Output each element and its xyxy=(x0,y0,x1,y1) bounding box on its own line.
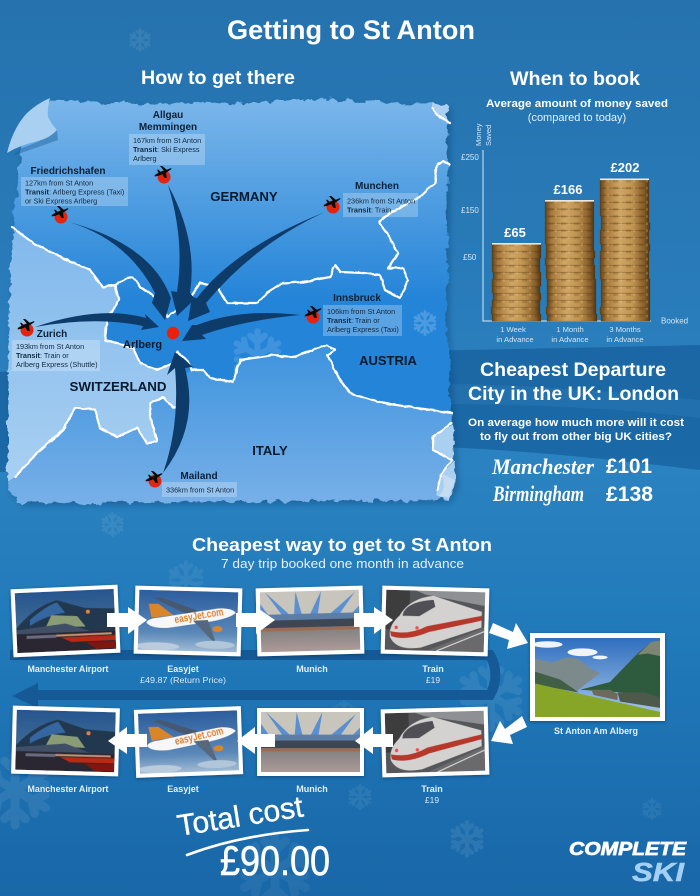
route labels: Manchester Airport xyxy=(28,784,108,794)
title: Getting to St Anton xyxy=(227,15,475,45)
location: Allgau Memmingen: Transit: Ski Express xyxy=(133,145,200,154)
bar labels: in Advance xyxy=(551,335,589,344)
total cost callout: £90.00 xyxy=(220,837,330,884)
chart axes: £150 xyxy=(461,206,479,215)
location: Zurich xyxy=(12,319,100,371)
logo: Complete Ski: SKI xyxy=(632,857,685,887)
text: departure question: On average how much more will it cost xyxy=(468,417,684,429)
route labels: Easyjet xyxy=(167,784,199,794)
location: Friedrichshafen: Transit: Arlberg Express (Taxi) xyxy=(25,188,124,196)
logo: Complete Ski xyxy=(569,839,687,887)
heading: cheapest way: Cheapest way to get to St Anton xyxy=(192,535,492,555)
text: chart subtitle xyxy=(486,98,668,124)
price list: other UK cities: Birmingham xyxy=(492,481,584,506)
heading: cheapest departure city: City in the UK: London xyxy=(468,384,679,405)
text: chart subtitle: (compared to today) xyxy=(528,112,626,124)
location: Allgau Memmingen: 167km from St Anton xyxy=(133,136,201,145)
bar values: £166 xyxy=(554,182,582,197)
location: Friedrichshafen: 127km from St Anton xyxy=(25,178,93,188)
country labels: ITALY xyxy=(252,443,288,458)
location: Munchen: Transit: Train xyxy=(347,206,391,214)
heading: cheapest way: 7 day trip booked one month in advance xyxy=(221,556,464,571)
bar labels: in Advance xyxy=(496,335,534,344)
white arrows between photos xyxy=(107,607,528,754)
photo: Easyjet outbound xyxy=(134,586,242,656)
chart axes: £250 xyxy=(461,153,479,162)
location: Zurich: 193km from St Anton xyxy=(16,342,84,351)
logo: Complete Ski: COMPLETE xyxy=(569,839,687,859)
photo: St Anton xyxy=(530,633,665,721)
location: Mailand xyxy=(146,471,237,497)
route labels: Munich xyxy=(296,784,328,794)
country labels xyxy=(70,189,417,458)
location: Mailand: Mailand xyxy=(180,471,218,482)
location: Mailand: 336km from St Anton xyxy=(166,486,234,494)
route labels: St Anton Am Alberg xyxy=(554,726,638,736)
location: Allgau Memmingen: Memmingen xyxy=(139,122,197,133)
route labels: Easyjet xyxy=(167,664,199,674)
chart axes xyxy=(461,123,688,326)
route labels: £49.87 (Return Price) xyxy=(140,675,226,685)
photo: Manchester Airport outbound xyxy=(11,585,120,657)
text: departure question xyxy=(468,417,684,443)
marker: Arlberg xyxy=(123,327,179,351)
country labels: AUSTRIA xyxy=(359,353,417,368)
location: Zurich: Zurich xyxy=(37,329,67,340)
route labels: £19 xyxy=(425,795,439,805)
heading: cheapest departure city xyxy=(468,360,679,405)
coin stack: 3 months xyxy=(600,180,650,321)
route band arrow xyxy=(10,655,495,708)
location: Munchen xyxy=(324,181,418,217)
location: Innsbruck: Innsbruck xyxy=(333,293,381,304)
location: Friedrichshafen xyxy=(21,166,128,224)
location: Munchen: Munchen xyxy=(355,181,399,192)
location: Allgau Memmingen: Arlberg xyxy=(133,154,157,163)
route labels: Manchester Airport xyxy=(28,664,108,674)
price list: other UK cities: £138 xyxy=(606,483,653,506)
price list: other UK cities: Manchester xyxy=(491,454,594,479)
chart axes: Money xyxy=(474,123,483,146)
heading: cheapest way xyxy=(192,535,492,571)
panel: map xyxy=(6,96,460,508)
route labels xyxy=(28,664,638,805)
total cost callout: Total cost xyxy=(175,790,306,843)
photo: Train outbound xyxy=(381,586,489,656)
coin stack: 1 week xyxy=(491,244,541,321)
bar labels: 3 Months xyxy=(609,325,641,334)
photo: Munich outbound xyxy=(256,586,364,656)
bar labels: 1 Week xyxy=(500,325,526,334)
coin stack: 1 month xyxy=(545,201,597,321)
route labels: Train xyxy=(421,784,443,794)
country labels: GERMANY xyxy=(210,189,278,204)
chart axes: £50 xyxy=(463,253,477,262)
location: Zurich: Transit: Train or xyxy=(16,351,69,360)
arrows to Arlberg xyxy=(35,185,325,473)
bar values xyxy=(504,160,639,240)
photo: Munich return xyxy=(257,708,364,776)
heading: when to book: When to book xyxy=(510,69,640,90)
price list: other UK cities: £101 xyxy=(606,455,652,478)
chart axes: Saved xyxy=(484,125,493,146)
country labels: SWITZERLAND xyxy=(70,379,166,394)
bar labels: 1 Month xyxy=(556,325,584,334)
total cost callout xyxy=(175,790,330,884)
chart axes: Booked xyxy=(661,316,688,326)
location: Allgau Memmingen: Allgau xyxy=(153,110,183,121)
location: Innsbruck xyxy=(305,293,402,336)
text: chart subtitle: Average amount of money saved xyxy=(486,98,668,110)
text: departure question: to fly out from other big UK cities? xyxy=(480,431,672,443)
marker: Arlberg: Arlberg xyxy=(123,339,162,351)
bar values: £65 xyxy=(504,225,526,240)
map curl xyxy=(7,98,58,156)
photo: Train return xyxy=(381,707,489,777)
location: Innsbruck: 106km from St Anton xyxy=(327,307,395,316)
bar labels xyxy=(496,325,644,344)
heading: how to get there: How to get there xyxy=(141,68,295,89)
price list: other UK cities xyxy=(491,454,653,506)
location: Innsbruck: Transit: Train or xyxy=(327,316,380,325)
location: Innsbruck: Arlberg Express (Taxi) xyxy=(327,325,399,334)
bar chart: coin stacks xyxy=(461,123,688,344)
location: Allgau Memmingen xyxy=(129,110,205,184)
photo: Manchester Airport return xyxy=(11,706,120,776)
bar labels: in Advance xyxy=(606,335,644,344)
photo: Easyjet return xyxy=(134,706,243,778)
location: Munchen: 236km from St Anton xyxy=(347,196,415,206)
route labels: Munich xyxy=(296,664,328,674)
location: Friedrichshafen: or Ski Express Arlberg xyxy=(25,196,97,206)
heading: cheapest departure city: Cheapest Departure xyxy=(480,360,666,381)
bar values: £202 xyxy=(611,160,639,175)
location: Zurich: Arlberg Express (Shuttle) xyxy=(16,360,98,369)
location: Friedrichshafen: Friedrichshafen xyxy=(30,166,106,177)
route labels: Train xyxy=(422,664,444,674)
route labels: £19 xyxy=(426,675,440,685)
